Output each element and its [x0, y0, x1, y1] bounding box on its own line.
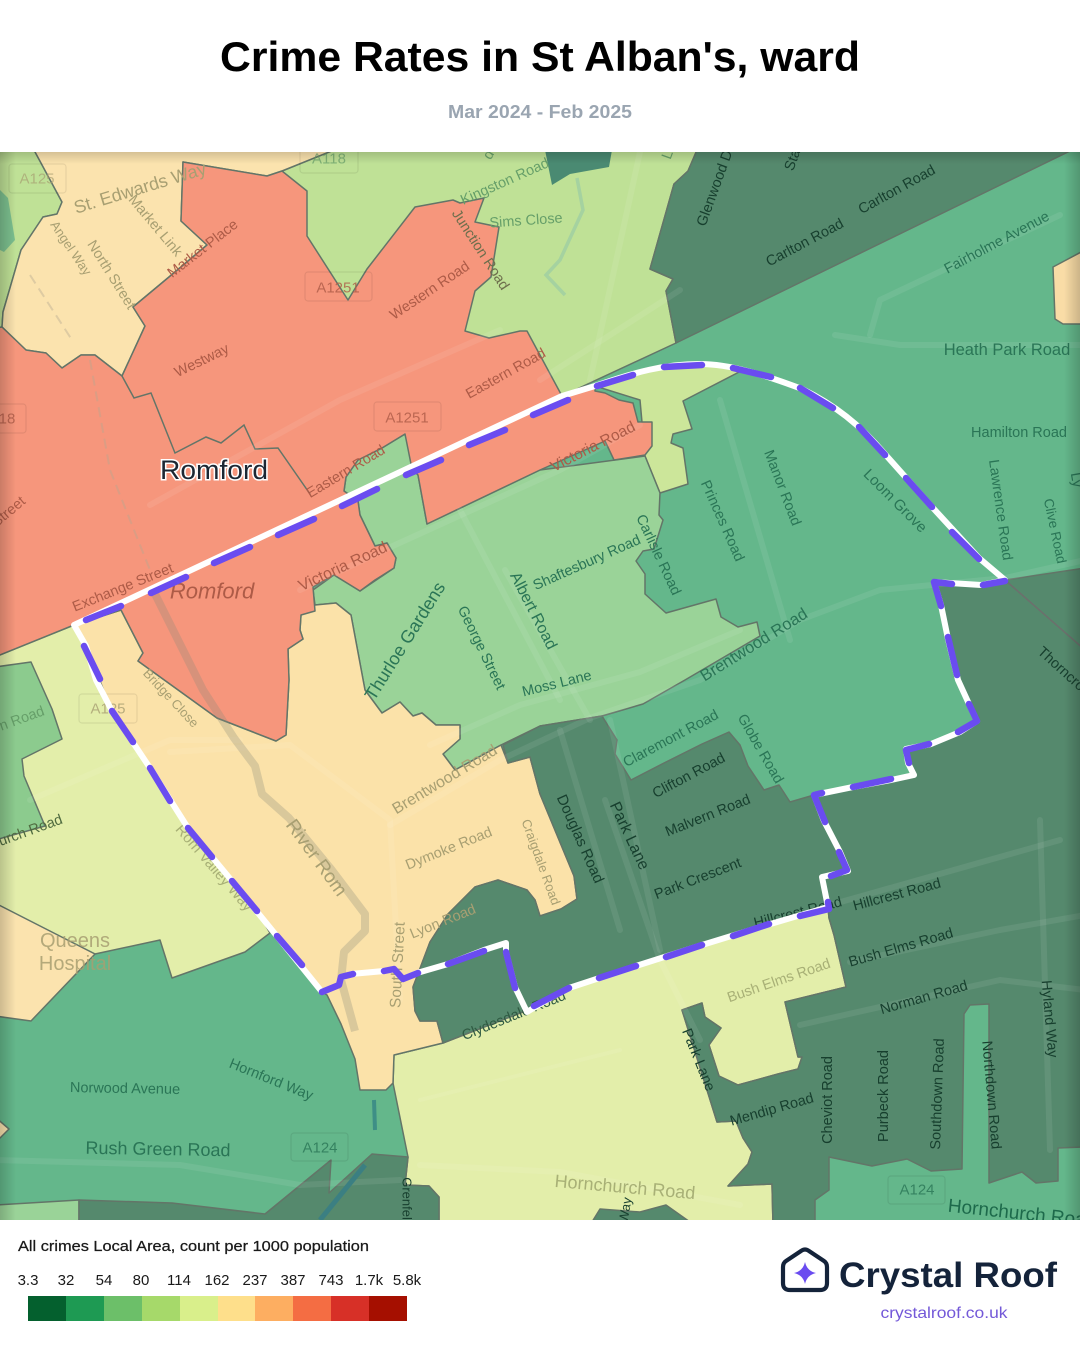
legend values: 3.3: [18, 1272, 38, 1289]
inner boundary east: [1008, 582, 1080, 646]
region: north-east cream edge: [1053, 250, 1080, 324]
legend values: 1.7k: [355, 1272, 384, 1289]
railway dashed line: [30, 275, 150, 570]
map street labels: Angel Way: [47, 218, 95, 278]
stream south: [374, 1100, 375, 1130]
title: Crime Rates in St Alban's, ward: [220, 33, 860, 80]
map street labels: Western Road: [387, 259, 473, 323]
region: north-west cream town area: [2, 150, 334, 376]
streets overlay: [0, 152, 1080, 1205]
map street labels: River Rom: [281, 816, 351, 900]
region: north light green band: [282, 150, 697, 396]
map street labels: Sims Close: [489, 210, 563, 232]
map street labels: A1251: [316, 280, 360, 296]
map street labels: South Street: [387, 921, 409, 1008]
map street labels: George Street: [454, 604, 508, 692]
map street labels: Market Place: [165, 217, 241, 281]
map street labels: Lyon Road: [408, 902, 478, 942]
map street labels: Craigdale Road: [519, 817, 563, 907]
region: bottom-left strip: [0, 1199, 80, 1220]
map street labels: Westway: [172, 341, 232, 381]
region: bottom dark patch: [592, 1205, 690, 1222]
map street labels: A118: [312, 150, 346, 168]
map street labels: Dymoke Road: [403, 824, 495, 874]
logo url: crystalroof.co.uk: [880, 1305, 1009, 1322]
region: south yellow green: [393, 907, 846, 1225]
map street labels: Hillcrest Road: [752, 894, 844, 932]
map street labels: St. Edwards Way: [71, 158, 209, 218]
map street labels: Carlisle Road: [632, 512, 684, 598]
logo: Crystal Roof: [783, 1250, 1057, 1322]
region: bottom dark green: [79, 1154, 439, 1225]
map street labels: Junction Road: [448, 207, 512, 293]
map street labels: A125: [19, 170, 55, 188]
map street labels: L: [659, 148, 677, 162]
map street labels: A124: [302, 1140, 338, 1156]
legend values: 114: [167, 1272, 191, 1289]
legend values: 5.8k: [393, 1272, 422, 1289]
legend colour scale: [28, 1296, 407, 1321]
ward boundary: purple dashes: [84, 365, 1005, 1006]
region: central mid green ward area: [313, 434, 760, 770]
legend values: 237: [242, 1272, 268, 1289]
river Rom: [155, 594, 365, 1031]
region: ward cream area: [74, 603, 577, 1090]
map street labels: Albert Road: [506, 569, 560, 653]
map street labels: Princes Road: [697, 478, 747, 564]
map street labels: Clive Road: [1041, 497, 1069, 565]
map street labels: Queens: [40, 930, 110, 952]
map street labels: Hamilton Road: [971, 425, 1067, 441]
map street labels: Norwood Avenue: [70, 1080, 180, 1098]
legend values: 32: [58, 1272, 74, 1289]
map street labels: Victoria Road: [296, 539, 390, 595]
map street labels: Purbeck Road: [876, 1050, 892, 1142]
region: Romford high-crime red: [0, 162, 652, 741]
map street labels: Rom Valley Way: [172, 821, 257, 915]
map street labels: Heath Park Road: [944, 341, 1070, 359]
map street labels: Southdown Road: [928, 1038, 948, 1150]
map street labels: Globe Road: [734, 711, 786, 787]
map street labels: Carlton Road: [764, 216, 846, 270]
region: south-west yellow green: [0, 625, 270, 978]
map street labels: North Street: [84, 238, 138, 312]
map street labels: Fairholme Avenue: [942, 209, 1052, 277]
map street labels: Malvern Road: [663, 792, 753, 840]
legend values: 743: [318, 1272, 344, 1289]
region: top teal pond patch: [545, 150, 612, 185]
map street labels: Hospital: [39, 953, 111, 975]
map street labels: Hornchurch Road: [554, 1171, 696, 1203]
map street labels: Loom Grove: [860, 466, 930, 536]
map street labels: Lawrence Road: [985, 459, 1015, 561]
map street labels: Park Lane: [678, 1026, 718, 1094]
map street labels: Norman Road: [878, 978, 970, 1018]
map street labels: Victoria Road: [548, 418, 638, 476]
ward boundary: St Alban's white line: [74, 364, 1005, 1012]
legend values: [18, 1272, 422, 1289]
map street labels: Way: [615, 1196, 635, 1224]
map street labels: Grenfell: [400, 1177, 414, 1223]
map street labels: A125: [90, 700, 126, 718]
map street labels: Brentwood Road: [390, 742, 500, 818]
map street labels: A1251: [385, 410, 429, 426]
road shields: [0, 145, 945, 1204]
stream in north park: [546, 178, 583, 295]
map street labels: Eastern Road: [304, 442, 388, 502]
place label: Romford: Romford: [160, 455, 268, 485]
map street labels: A124: [899, 1182, 935, 1198]
subtitle: date range: Mar 2024 - Feb 2025: [448, 102, 632, 122]
region: ward north light green patch: [595, 364, 743, 493]
map street labels: Exchange Street: [70, 561, 176, 615]
region: west-edge teal strip: [0, 190, 15, 252]
region: south and east dark green: [413, 568, 1080, 1225]
map street labels: Thurloe Gardens: [361, 578, 449, 704]
icon: house with star: [783, 1250, 827, 1290]
region: Queens Hospital cream: [0, 903, 95, 1021]
map street labels: Shaftesbury Road: [531, 532, 643, 594]
map street labels: Hyland Way: [1038, 980, 1060, 1059]
map street labels: Rush Green Road: [85, 1138, 231, 1160]
map street labels: d: [480, 148, 498, 162]
legend values: 387: [280, 1272, 306, 1289]
map street labels: Claremont Road: [621, 707, 721, 771]
region: north-west corner light green: [0, 150, 62, 330]
map street labels: Brentwood Road: [697, 605, 811, 685]
map street labels: Cheviot Road: [820, 1056, 836, 1144]
map street labels: Park Crescent: [652, 855, 744, 903]
logo wordmark: Crystal Roof: [839, 1256, 1057, 1295]
legend values: 80: [133, 1272, 149, 1289]
inner boundary within red area: [122, 376, 310, 494]
map street labels: Hillcrest Road: [851, 876, 943, 914]
map street labels: Bush Elms Road: [847, 925, 955, 971]
map street labels: Bush Elms Road: [725, 956, 833, 1006]
legend: [18, 1239, 422, 1321]
region: north-east dark green band: [650, 150, 1072, 343]
map street labels: Kingston Road: [458, 155, 552, 209]
legend title: All crimes Local Area, count per 1000 population: [18, 1239, 369, 1255]
map street labels: Manor Road: [760, 448, 804, 528]
map street labels: Moss Lane: [521, 668, 593, 700]
region: small west cream edge: [0, 1120, 10, 1139]
map street labels: Park Lane: [606, 799, 652, 873]
map street labels: Market Link: [125, 192, 186, 260]
map street labels: Clydesdale Road: [460, 988, 568, 1044]
legend values: 54: [96, 1272, 112, 1289]
legend values: 162: [204, 1272, 230, 1289]
map street labels: Glenwood Dr: [694, 143, 738, 228]
railway in south: [320, 1165, 365, 1220]
map street labels: Sta: [782, 146, 805, 173]
map street labels: Douglas Road: [553, 792, 607, 886]
map street labels: Hornford Way: [227, 1056, 316, 1104]
map street labels: Clifton Road: [650, 750, 728, 802]
map street labels: Mendip Road: [728, 1090, 816, 1130]
map street labels: Romford: [170, 578, 255, 604]
map street labels: Eastern Road: [463, 346, 549, 402]
region: far-west mid green: [0, 662, 62, 840]
map street labels: Northdown Road: [978, 1040, 1004, 1150]
map street labels: Bridge Close: [140, 666, 202, 730]
map street labels: Carlton Road: [856, 162, 938, 218]
